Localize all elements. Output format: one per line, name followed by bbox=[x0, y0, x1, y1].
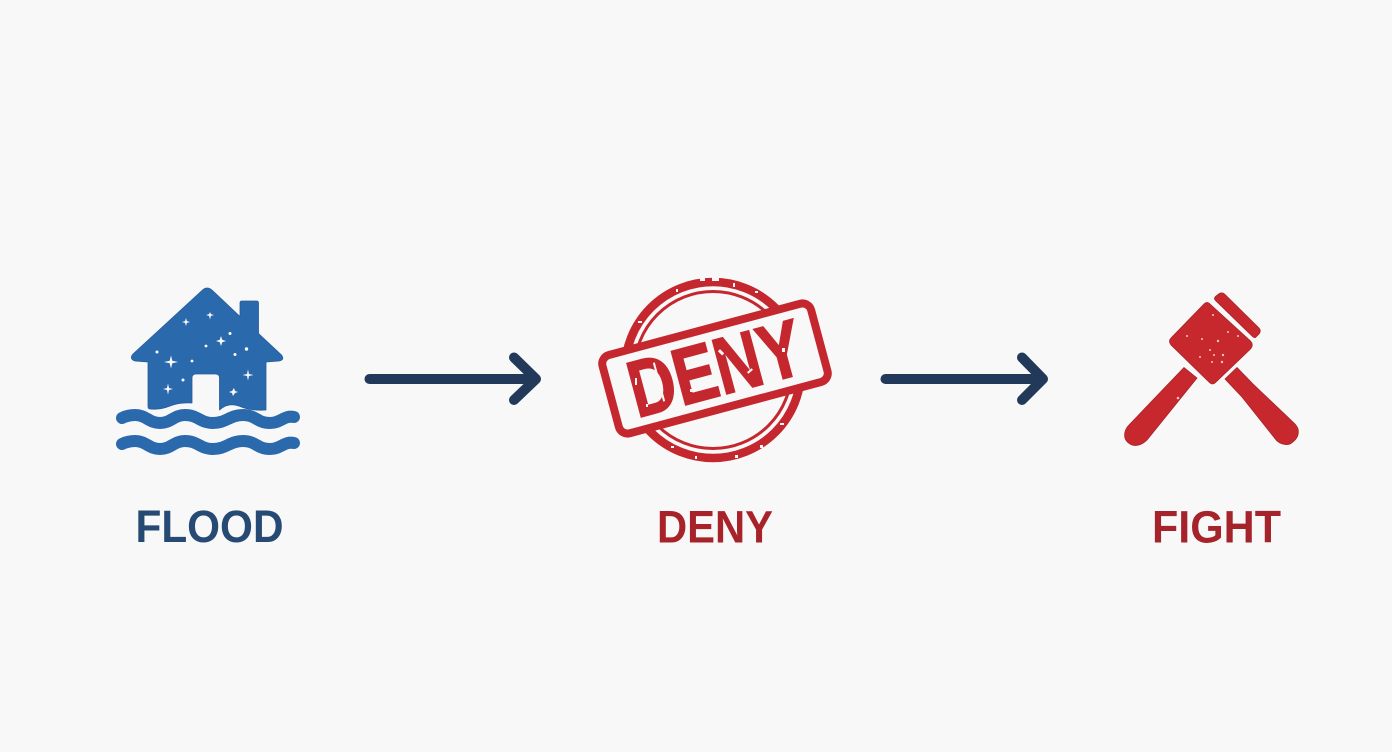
label: FLOOD: FLOOD bbox=[136, 501, 284, 552]
gavel speckles bbox=[1177, 314, 1239, 399]
sparkles on house bbox=[156, 312, 254, 396]
icon: flooded house bbox=[122, 288, 294, 449]
gavel top bar bbox=[1214, 293, 1260, 338]
stamp inner ring bbox=[634, 292, 792, 448]
flood water waves bbox=[122, 415, 294, 449]
icon: DENY stamp bbox=[599, 275, 831, 459]
icon: gavel bbox=[1125, 293, 1298, 445]
ring wear marks bbox=[638, 275, 784, 459]
stamp rectangle banner bbox=[599, 298, 831, 439]
house body bbox=[131, 288, 283, 410]
stamp lettering wear bbox=[635, 330, 785, 407]
gavel left handle bbox=[1125, 368, 1197, 445]
stamp outer ring bbox=[625, 282, 801, 458]
label: FIGHT: FIGHT bbox=[1152, 502, 1281, 552]
gavel head bbox=[1170, 302, 1252, 384]
gavel right handle bbox=[1225, 368, 1298, 445]
label: DENY: DENY bbox=[657, 502, 773, 552]
arrow: flood to deny bbox=[370, 358, 536, 400]
stamp word DENY: DENY bbox=[618, 302, 812, 434]
arrow: deny to fight bbox=[886, 358, 1043, 400]
